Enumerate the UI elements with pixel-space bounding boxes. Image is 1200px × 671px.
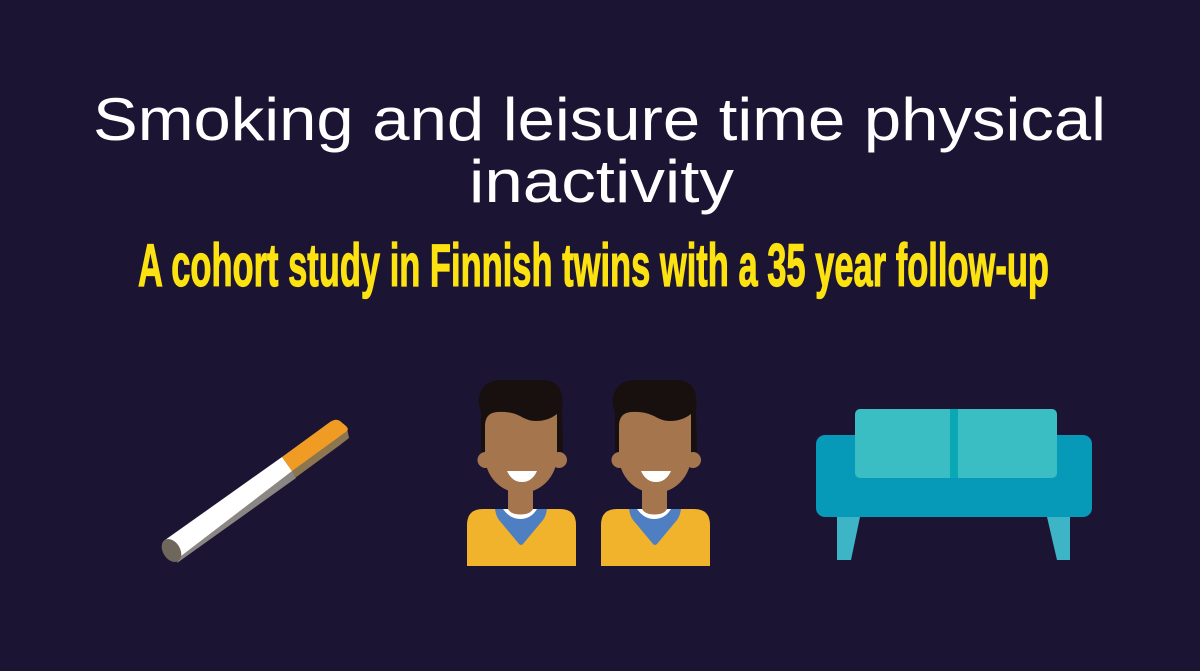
sofa legs bbox=[837, 517, 1070, 560]
face bbox=[485, 412, 557, 493]
sofa cushions bbox=[855, 409, 1057, 478]
neck bbox=[508, 485, 533, 515]
collar bbox=[503, 509, 537, 519]
face bbox=[619, 412, 691, 493]
cushion divider bbox=[950, 409, 958, 478]
collar bbox=[637, 509, 671, 519]
title bbox=[93, 86, 1106, 215]
neck base bbox=[508, 509, 533, 514]
sweater bbox=[467, 509, 576, 566]
sweater bbox=[601, 509, 710, 566]
hair back bbox=[613, 380, 697, 452]
ears bbox=[478, 452, 567, 468]
smile bbox=[507, 471, 537, 482]
neck base bbox=[642, 509, 667, 514]
icon: cigarette bbox=[158, 420, 349, 566]
icon: twin left bbox=[467, 380, 576, 566]
title: Smoking and leisure time physical bbox=[93, 86, 1106, 153]
icon: twin right bbox=[601, 380, 710, 566]
shirt bbox=[629, 509, 681, 545]
neck bbox=[642, 485, 667, 515]
smile bbox=[641, 471, 671, 482]
ears bbox=[612, 452, 701, 468]
hair back bbox=[479, 380, 563, 452]
icon: sofa bbox=[816, 409, 1092, 560]
shirt bbox=[495, 509, 547, 545]
sofa base bbox=[816, 435, 1092, 517]
title: inactivity bbox=[469, 148, 734, 215]
